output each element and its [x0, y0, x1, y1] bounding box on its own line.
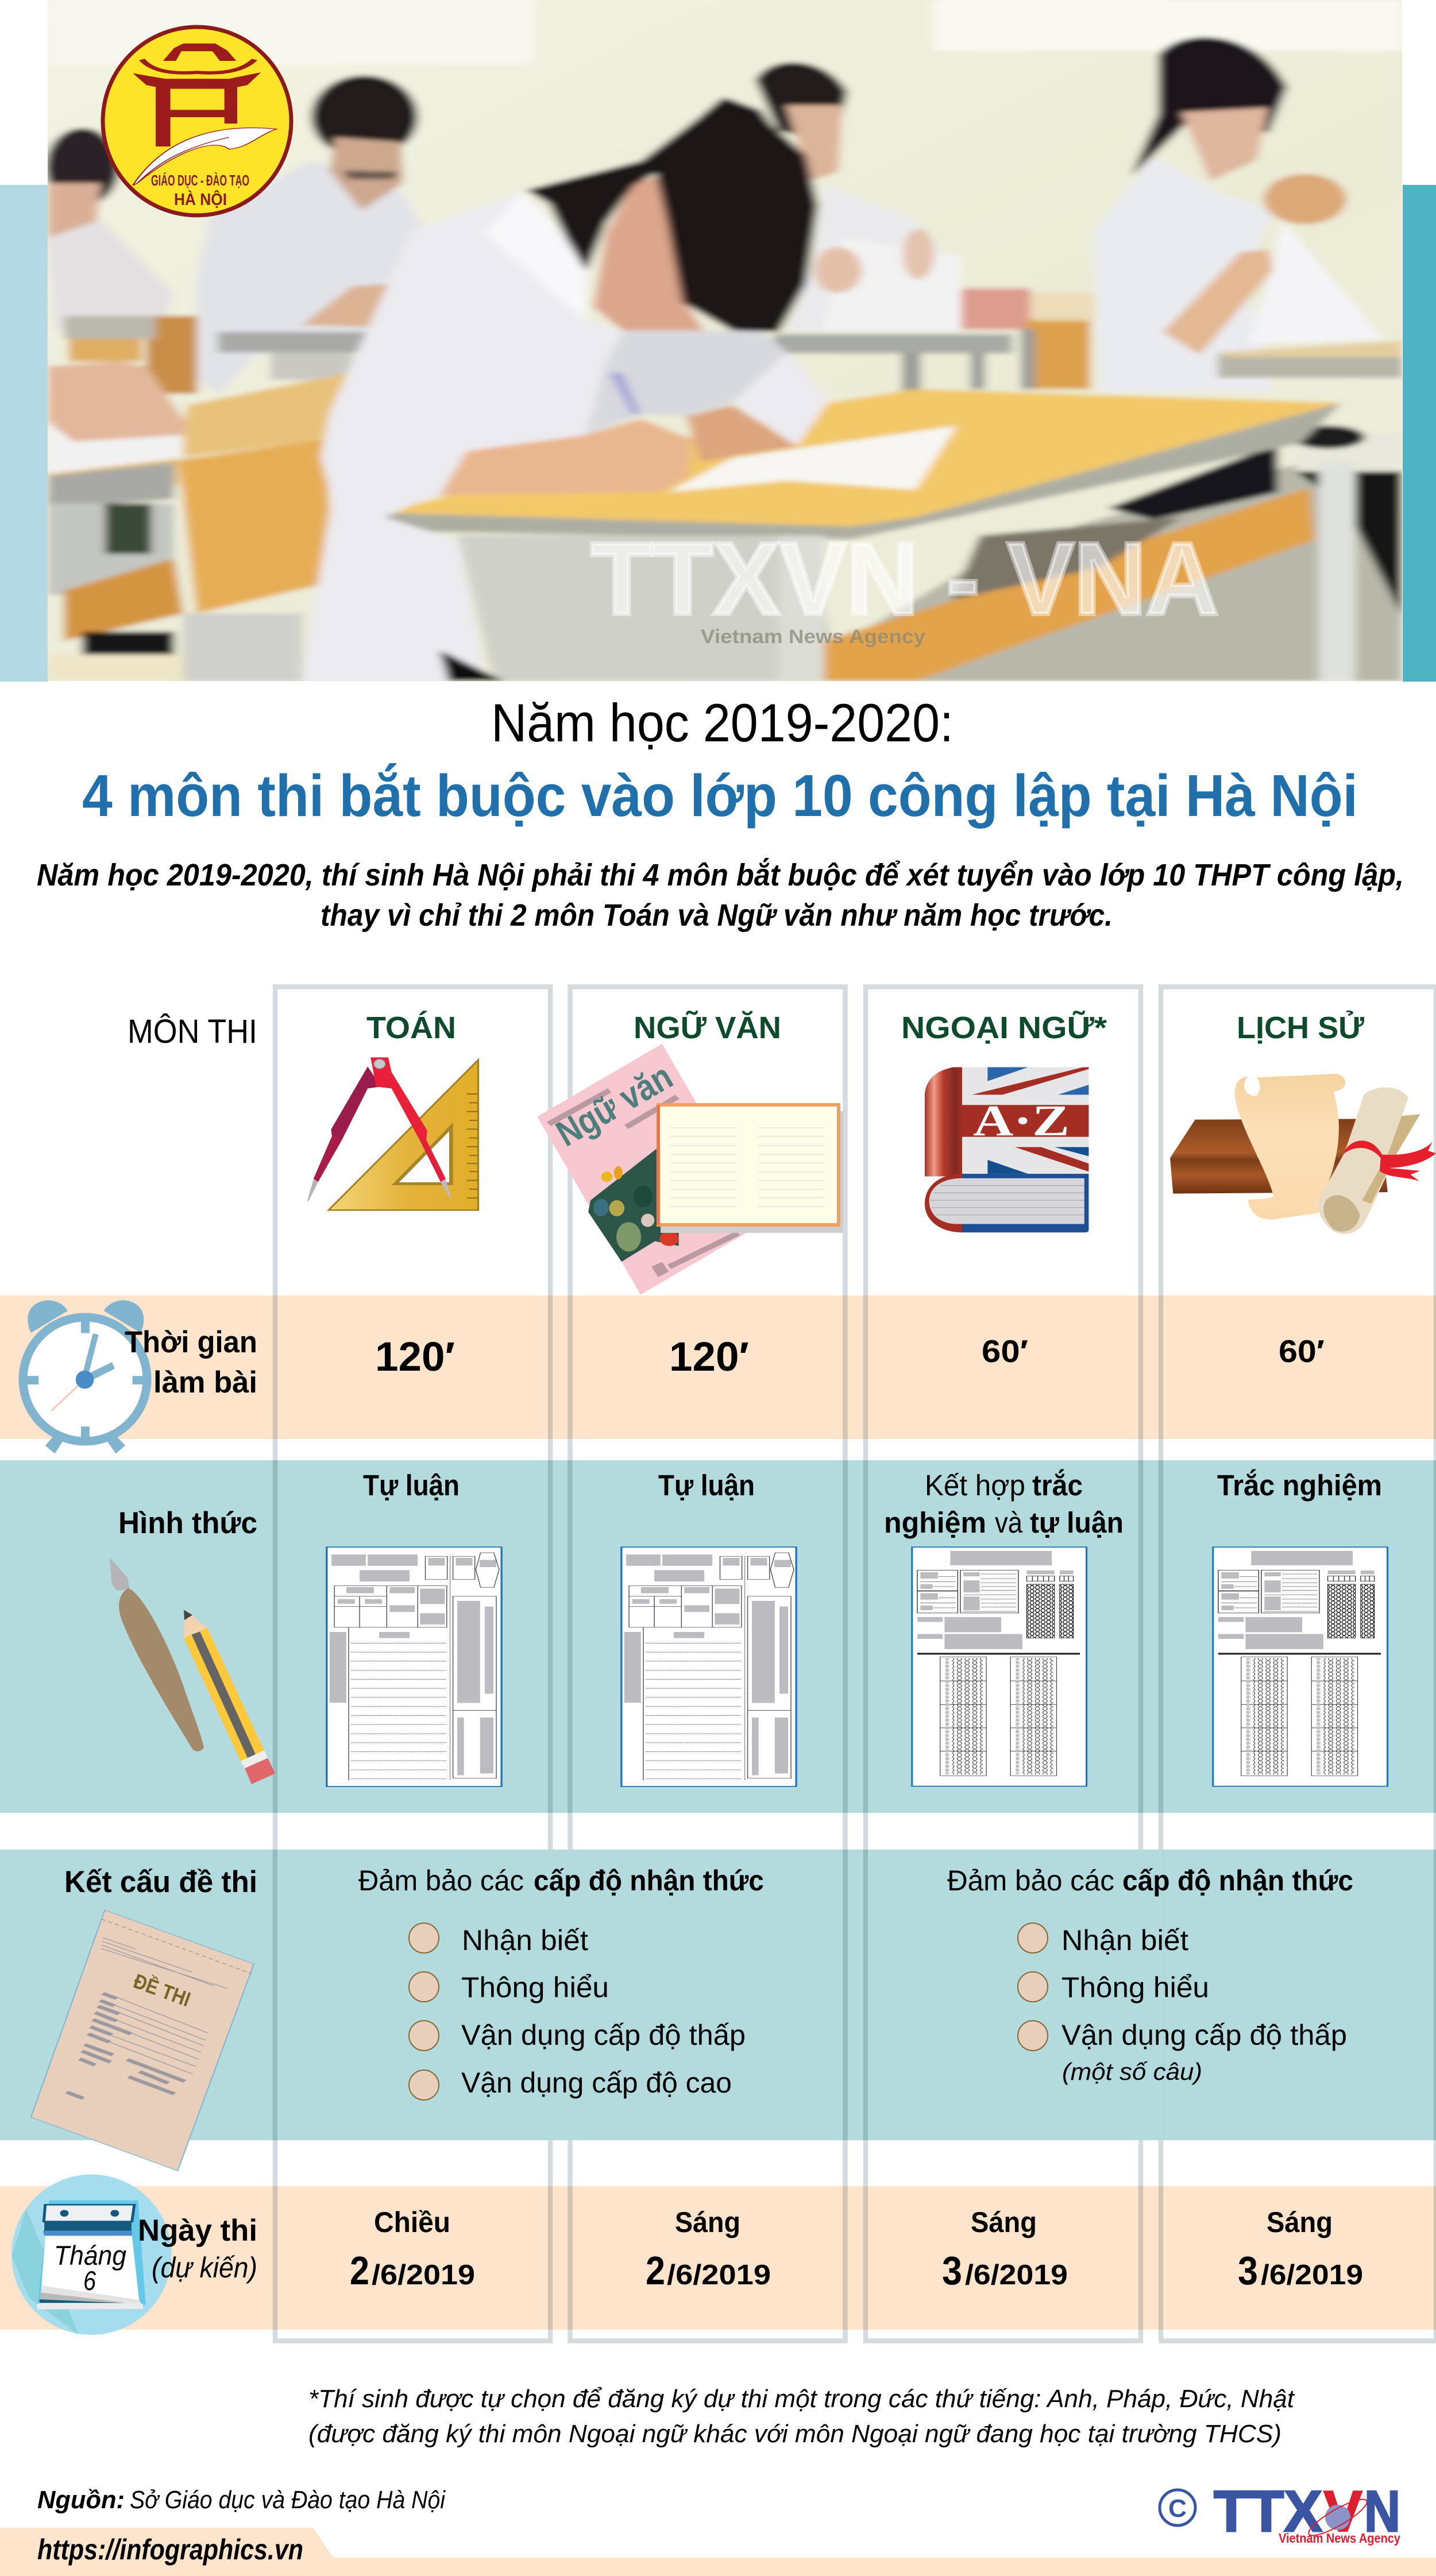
row band: kết cấu đề thi: [0, 1850, 1436, 2140]
structure: left group (Toán, Ngữ văn): cấp độ nhận thức: [534, 1865, 764, 1897]
date: Toán: /6/2019: [372, 2260, 475, 2291]
format: Ngoại ngữ: tự luận: [1030, 1506, 1124, 1539]
row label: thời gian làm bài: [125, 1325, 257, 1399]
bullet: vận dụng cấp độ thấp: Vận dụng cấp độ thấp: [1061, 2019, 1347, 2051]
bullet: vận dụng cấp độ thấp: [1018, 2019, 1347, 2085]
logo: Sở Giáo dục Đào tạo Hà Nội: HÀ NỘI: [174, 189, 227, 209]
date: Toán: Chiều: [374, 2206, 450, 2238]
heading: Lịch sử: LỊCH SỬ: [1237, 1011, 1364, 1045]
logo: TTXVN: N: [1364, 2480, 1400, 2544]
footnote: [308, 2385, 1295, 2448]
answer sheet: Ngữ văn: [622, 1547, 796, 1786]
logo: Sở Giáo dục Đào tạo Hà Nội: GIÁO DỤC - ĐÀO TẠO: [151, 172, 249, 189]
bullet: thông hiểu: Thông hiểu: [461, 1971, 609, 2003]
date: Ngữ văn: /6/2019: [667, 2260, 771, 2291]
logo: Sở Giáo dục Đào tạo Hà Nội: [103, 27, 291, 215]
logo: TTXVN: Vietnam News Agency: [1279, 2531, 1400, 2546]
answer sheet: Ngoại ngữ: [912, 1547, 1087, 1786]
structure: left group (Toán, Ngữ văn): [358, 1865, 764, 2100]
row label: thời gian làm bài: Thời gian: [125, 1325, 257, 1359]
main desk: [380, 389, 1342, 533]
answer sheet: Toán: [327, 1547, 501, 1786]
row label: môn thi: MÔN THI: [128, 1013, 257, 1050]
duration: Ngoại ngữ: 60′: [982, 1333, 1028, 1369]
date: Ngoại ngữ: Sáng: [971, 2206, 1037, 2238]
icon: exam paper: [31, 1910, 254, 2171]
icon: calendar June: Tháng: [54, 2240, 126, 2271]
intro text: [37, 858, 1404, 933]
format: Ngoại ngữ: trắc: [1032, 1468, 1083, 1502]
bullet: vận dụng cấp độ cao: Vận dụng cấp độ cao: [461, 2067, 732, 2099]
date: Lịch sử: /6/2019: [1261, 2260, 1363, 2291]
date: Ngoại ngữ: /6/2019: [965, 2260, 1068, 2291]
fourth student: [1094, 156, 1273, 392]
date: Ngữ văn: Sáng: [675, 2206, 740, 2238]
row label: hình thức: Hình thức: [118, 1506, 257, 1540]
row label: ngày thi dự kiến: (dự kiến): [152, 2252, 257, 2284]
back desks: [1213, 353, 1402, 380]
icon: history book and scroll: [1170, 1074, 1436, 1234]
date: Ngoại ngữ: 3: [942, 2248, 962, 2293]
date: Toán: [350, 2206, 475, 2293]
panel: left side strip: [0, 185, 48, 682]
icon: pen and pencil: [110, 1557, 275, 1784]
structure: left group (Toán, Ngữ văn): Đảm bảo các: [358, 1865, 524, 1897]
bullet: vận dụng cấp độ thấp: Vận dụng cấp độ thấp: [461, 2019, 746, 2051]
date: Lịch sử: [1238, 2206, 1363, 2293]
icon: alarm clock: [23, 1300, 147, 1453]
answer sheet: Lịch sử: [1213, 1547, 1388, 1786]
format: Ngoại ngữ: nghiệm: [884, 1506, 986, 1539]
source: Sở Giáo dục và Đào tạo Hà Nội: [130, 2486, 446, 2514]
icon: English dictionary: A·Z: [973, 1097, 1070, 1145]
title: main heading: 4 môn thi bắt buộc vào lớp 10 công lập tại Hà Nội: [82, 763, 1358, 829]
row band: ngày thi: [0, 2186, 1436, 2330]
date: Ngoại ngữ: [942, 2206, 1068, 2293]
footer band: [0, 2528, 1436, 2576]
main student: [302, 192, 829, 681]
row band: thời gian: [0, 1295, 1436, 1439]
bullet: nhận biết: Nhận biết: [1061, 1924, 1188, 1956]
second student: [197, 160, 421, 394]
footnote: (được đăng ký thi môn Ngoại ngữ khác với môn Ngoại ngữ đang học tại trường THCS): [308, 2420, 1281, 2448]
icon: Ngữ văn textbook and notebook: Ngữ văn: [549, 1055, 680, 1154]
panel: right side strip: [1403, 185, 1436, 682]
duration: Lịch sử: 60′: [1279, 1333, 1325, 1369]
format: Ngoại ngữ: Kết hợp: [925, 1469, 1025, 1502]
watermark: TTXVN - VNA: TTXVN - VNA: [591, 521, 1218, 636]
footnote: *Thí sinh được tự chọn để đăng ký dự thi một trong các thứ tiếng: Anh, Pháp, Đức, Nhật: [308, 2385, 1295, 2413]
structure: right group (Ngoại ngữ, Lịch sử): [947, 1865, 1353, 2085]
watermark: TTXVN - VNA: Vietnam News Agency: [701, 626, 925, 648]
format: Ngoại ngữ: [884, 1468, 1124, 1539]
row label: ngày thi dự kiến: Ngày thi: [138, 2214, 257, 2248]
icon: calendar June: [11, 2175, 172, 2335]
logo: TTXVN: V: [1323, 2480, 1362, 2544]
date: Lịch sử: 3: [1238, 2248, 1258, 2293]
bullet: nhận biết: Nhận biết: [462, 1924, 588, 1956]
date: Toán: 2: [350, 2248, 369, 2293]
date: Ngữ văn: [646, 2206, 771, 2293]
bullet: vận dụng cấp độ thấp: (một số câu): [1062, 2058, 1202, 2085]
date: Ngữ văn: 2: [646, 2248, 665, 2293]
format: Ngoại ngữ: và: [995, 1506, 1023, 1539]
icon: set square and compass: [307, 1057, 478, 1210]
left desks and chairs: [146, 316, 197, 394]
column frames: [275, 987, 1436, 2341]
logo: TTXVN: [1160, 2480, 1400, 2546]
duration: Ngữ văn: 120′: [669, 1335, 749, 1380]
icon: English dictionary: [925, 1067, 1088, 1232]
bullet: nhận biết: [409, 1923, 588, 1956]
bullet: nhận biết: [1018, 1923, 1188, 1956]
row label: thời gian làm bài: làm bài: [153, 1366, 257, 1399]
format: Toán: Tự luận: [363, 1469, 460, 1502]
row band: hình thức: [0, 1460, 1436, 1813]
structure: right group (Ngoại ngữ, Lịch sử): Đảm bảo các: [947, 1865, 1114, 1897]
heading: Ngoại ngữ: NGOẠI NGỮ*: [901, 1011, 1107, 1045]
icon: Ngữ văn textbook and notebook: [537, 1044, 843, 1295]
third student: [788, 183, 962, 332]
duration: Toán: 120′: [375, 1335, 455, 1380]
heading: Toán: TOÁN: [366, 1011, 456, 1045]
photo: students taking an exam: [37, 0, 1410, 687]
source: Nguồn:: [37, 2486, 125, 2514]
row label: kết cấu đề thi: Kết cấu đề thi: [64, 1865, 257, 1899]
icon: calendar June: 6: [83, 2265, 96, 2296]
row label: ngày thi dự kiến: [138, 2214, 257, 2284]
intro text: thay vì chỉ thi 2 môn Toán và Ngữ văn như năm học trước.: [321, 898, 1113, 933]
format: Lịch sử: Trắc nghiệm: [1217, 1468, 1382, 1502]
title: year: Năm học 2019-2020:: [491, 693, 954, 753]
logo: TTXVN: C: [1168, 2494, 1187, 2523]
icon: exam paper: ĐỀ THI: [130, 1969, 194, 2011]
left student: [46, 128, 119, 206]
heading: Ngữ văn: NGỮ VĂN: [634, 1011, 781, 1045]
footer url: https://infographics.vn: [37, 2534, 303, 2566]
bullet: thông hiểu: Thông hiểu: [1061, 1971, 1209, 2003]
right foreground dark areas: [874, 464, 1402, 681]
structure: right group (Ngoại ngữ, Lịch sử): cấp độ nhận thức: [1122, 1865, 1353, 1897]
date: Lịch sử: Sáng: [1267, 2206, 1333, 2238]
logo: TTXVN: TTX: [1214, 2480, 1322, 2544]
format: Ngữ văn: Tự luận: [658, 1469, 755, 1502]
